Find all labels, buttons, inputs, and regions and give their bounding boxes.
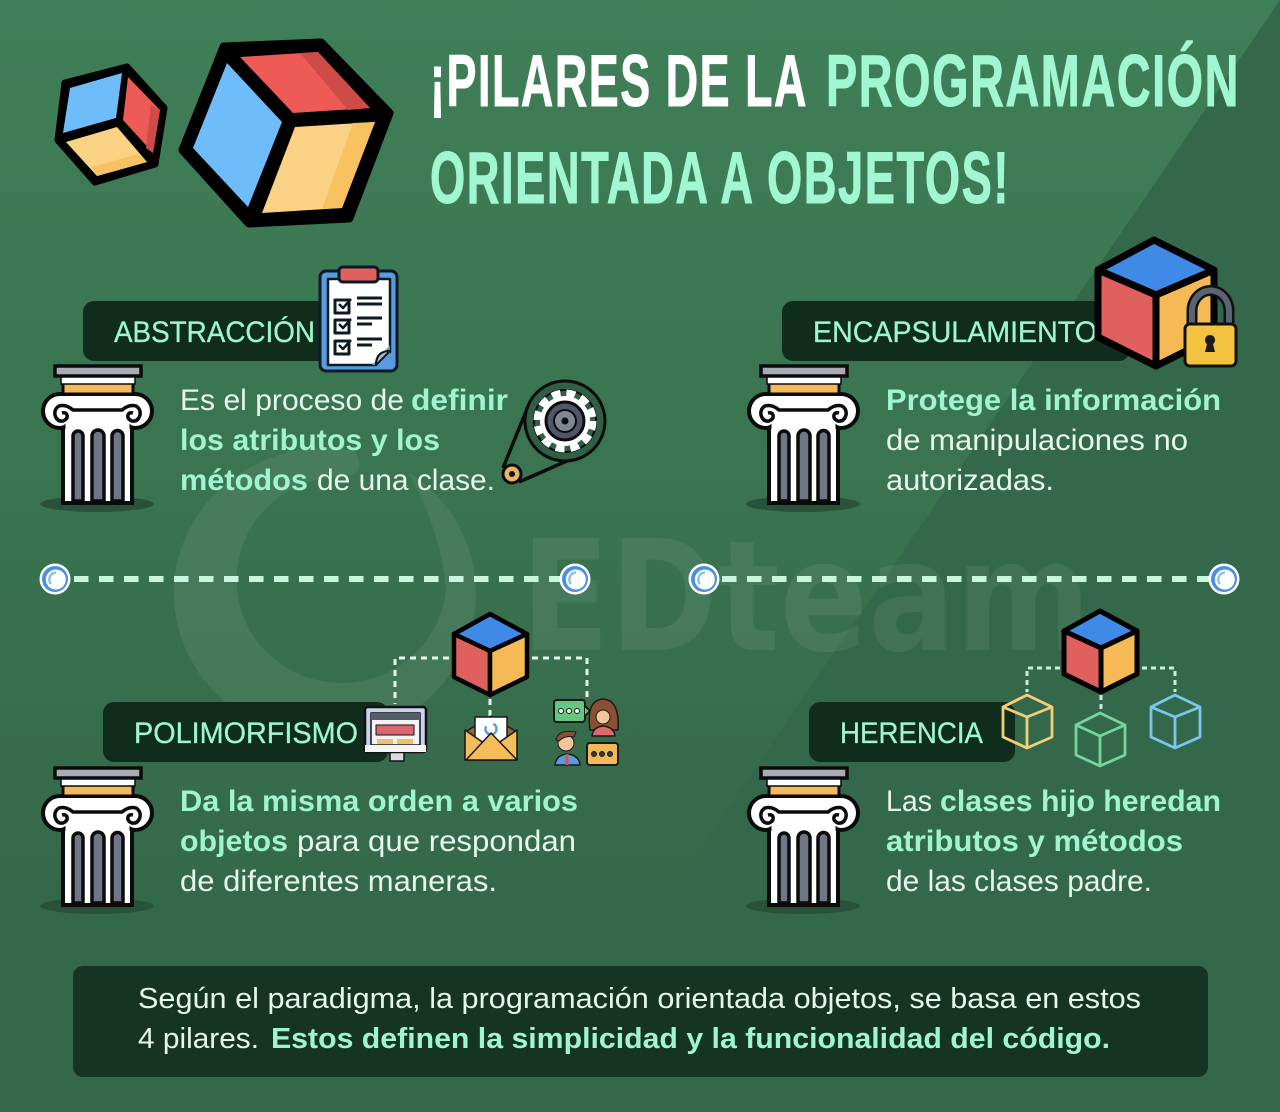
- text block: abstracción: métodos: [180, 464, 308, 497]
- icon: large and small cubes: [58, 43, 389, 223]
- icon: central cube: [454, 614, 527, 695]
- icon: column: [746, 366, 860, 512]
- icon: cube with padlock: [1098, 240, 1236, 366]
- text block: polimorfismo: [180, 785, 578, 898]
- text block: encapsulamiento: autorizadas.: [886, 464, 1054, 497]
- divider: left dashed line: [40, 564, 590, 594]
- panel: abstracción: [40, 267, 605, 512]
- icon: people chatting: [554, 699, 618, 765]
- heading: encapsulamiento: [782, 301, 1130, 361]
- text block: abstracción: definir: [411, 384, 508, 417]
- text block: abstracción: [180, 384, 508, 497]
- icon: green child cube: [1076, 713, 1125, 766]
- heading: polimorfismo: [103, 702, 388, 762]
- text block: encapsulamiento: Protege la información: [886, 384, 1221, 417]
- icon: central cube: [1064, 611, 1137, 692]
- text block: herencia: de las clases padre.: [886, 865, 1152, 898]
- title: ¡PILARES DE LA: [430, 41, 808, 122]
- text block: polimorfismo: objetos: [180, 825, 288, 858]
- connectors: herencia: [1027, 668, 1175, 710]
- text block: herencia: atributos y métodos: [886, 825, 1183, 858]
- heading: herencia: HERENCIA: [840, 717, 983, 750]
- heading: herencia: [809, 702, 1015, 762]
- icon: gear with belt: [503, 381, 605, 483]
- panel: footer note: Según el paradigma, la programación orientada objetos, se basa en estos: [138, 983, 1141, 1015]
- text block: encapsulamiento: de manipulaciones no: [886, 424, 1188, 457]
- panel: encapsulamiento: [746, 240, 1236, 512]
- text block: polimorfismo: Da la misma orden a varios: [180, 785, 578, 818]
- text block: herencia: Las: [886, 785, 932, 818]
- panel: herencia: [746, 611, 1221, 914]
- icon: blue child cube: [1151, 695, 1200, 748]
- heading: polimorfismo: POLIMORFISMO: [134, 717, 358, 750]
- text block: encapsulamiento: [886, 384, 1221, 497]
- text block: abstracción: Es el proceso de: [180, 384, 404, 417]
- watermark: EDteam logo: [174, 448, 1091, 738]
- icon: column: [746, 768, 860, 914]
- connectors: polimorfismo: [395, 658, 587, 716]
- panel: polimorfismo: [40, 614, 618, 914]
- text block: herencia: clases hijo heredan: [940, 785, 1221, 818]
- watermark: EDteam logo: EDteam: [521, 508, 1091, 687]
- icon: clipboard: [320, 267, 397, 371]
- text block: herencia: [886, 785, 1221, 898]
- icon: envelope: [465, 716, 517, 760]
- heading: abstracción: [83, 301, 343, 361]
- text block: abstracción: los atributos y los: [180, 424, 440, 457]
- panel: footer note: 4 pilares.: [138, 1023, 259, 1055]
- heading: abstracción: ABSTRACCIÓN: [114, 316, 315, 349]
- panel: footer note: [73, 966, 1208, 1077]
- text block: polimorfismo: para que respondan: [297, 825, 576, 858]
- icon: monitor: [365, 707, 426, 761]
- icon: column: [40, 366, 154, 512]
- icon: column: [40, 768, 154, 914]
- panel: footer note: Estos definen la simplicidad y la funcionalidad del código.: [271, 1023, 1110, 1055]
- text block: polimorfismo: de diferentes maneras.: [180, 865, 497, 898]
- title: [430, 41, 1240, 219]
- divider: right dashed line: [688, 564, 1240, 594]
- heading: encapsulamiento: ENCAPSULAMIENTO: [813, 316, 1097, 349]
- text block: abstracción: de una clase.: [317, 464, 495, 497]
- icon: yellow child cube: [1003, 695, 1052, 748]
